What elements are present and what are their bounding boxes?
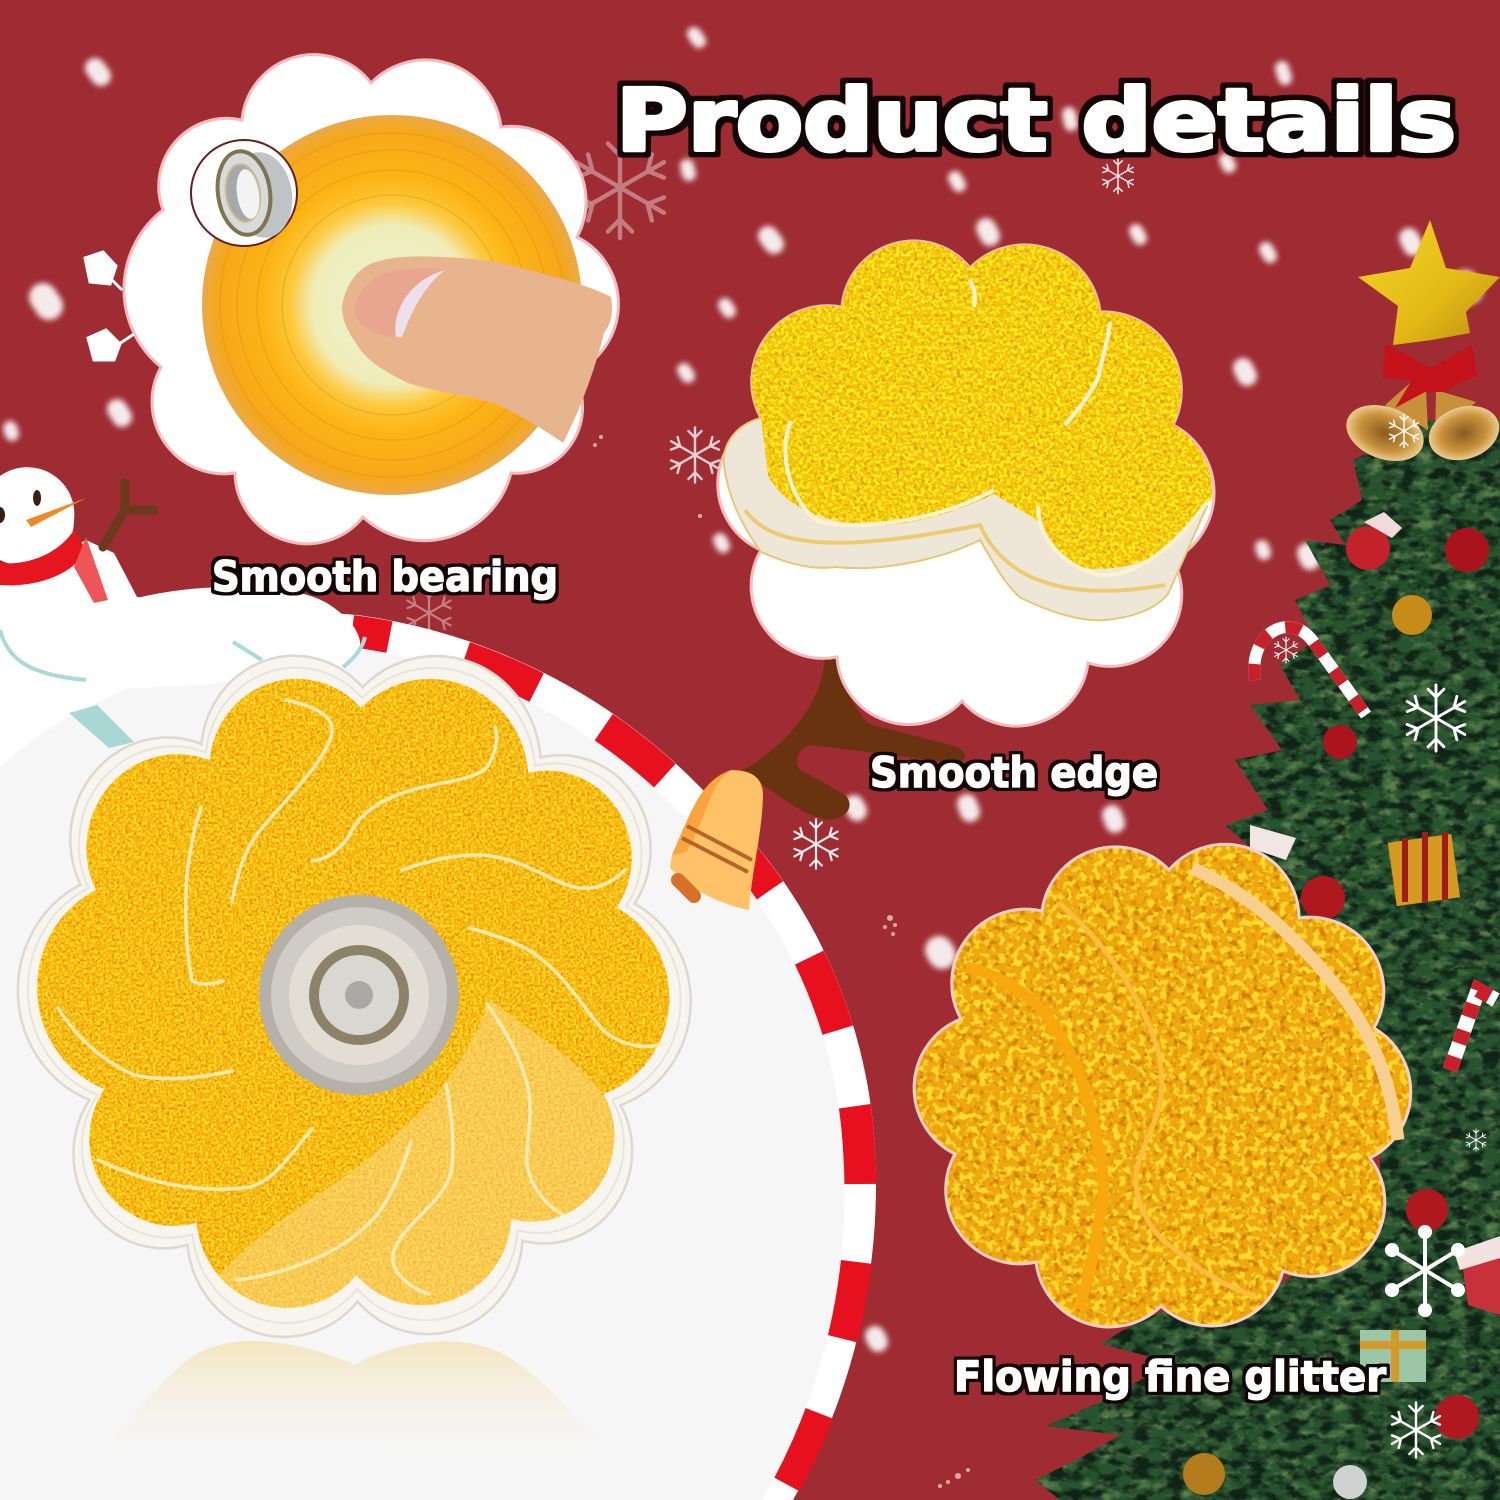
small flake on bell <box>1390 414 1418 448</box>
snowman arm <box>100 587 360 690</box>
snowman head <box>0 467 74 566</box>
clear acrylic outer edge <box>18 656 691 1337</box>
golden bells <box>1339 370 1500 471</box>
label: smooth bearing: Smooth bearing <box>212 552 558 601</box>
panel: smooth edge photo <box>718 241 1214 726</box>
tree ornaments <box>1183 512 1500 1499</box>
gold paw glitter <box>752 241 1212 569</box>
panel: smooth bearing photo <box>85 55 618 544</box>
scarf tail <box>74 537 108 603</box>
white cloud backdrop <box>124 55 618 544</box>
snowman teal shading <box>0 630 365 680</box>
label: smooth edge: Smooth edge <box>870 748 1158 797</box>
red scarf <box>0 530 86 585</box>
inner light disc <box>0 647 845 1500</box>
white circle with candy-cane ring <box>0 540 876 1500</box>
inner clear edge line <box>28 668 681 1323</box>
spinning orange disc <box>202 115 582 495</box>
carrot nose <box>26 498 86 527</box>
antler decoration <box>740 659 965 820</box>
dotted snowflake <box>1385 1225 1465 1317</box>
thumbnail <box>355 268 445 337</box>
thumb <box>342 256 612 443</box>
main gold spinner <box>18 656 691 1337</box>
title: Product details <box>616 71 1456 171</box>
tree snowflakes <box>1275 637 1486 1458</box>
ring red stripes <box>352 631 860 1488</box>
small glitter sprays <box>593 435 970 1488</box>
swirl blade lines <box>58 700 661 1294</box>
snowflakes <box>407 137 1133 869</box>
christmas tree <box>1035 220 1500 1500</box>
glitter flower body <box>914 844 1411 1327</box>
stockings <box>1346 526 1390 570</box>
rim gold band <box>745 510 1165 591</box>
stick arm <box>103 483 154 547</box>
snowman <box>0 467 365 690</box>
motion rings <box>220 133 564 477</box>
white cloud backdrop <box>718 241 1214 726</box>
flower outline <box>914 844 1411 1327</box>
bearing inset icon <box>191 140 298 246</box>
teal strip <box>69 705 134 748</box>
panel: flowing fine glitter photo <box>914 844 1411 1327</box>
star topper <box>1358 220 1500 345</box>
main spinner reflection <box>80 1341 625 1470</box>
center bearing hub <box>259 895 459 1095</box>
clear acrylic rim <box>724 418 1207 620</box>
gold glitter body <box>37 679 669 1308</box>
swirl highlights <box>785 280 1207 575</box>
snowman eyes <box>0 490 41 523</box>
small white hex marks <box>85 252 134 360</box>
clear swirl bands <box>967 868 1398 1309</box>
red bow <box>1383 343 1477 408</box>
pale glitter sheen <box>215 1000 623 1318</box>
tree foliage <box>1035 420 1500 1500</box>
label: flowing fine glitter: Flowing fine glitter <box>954 1352 1386 1401</box>
ring white base <box>0 540 876 1500</box>
orange bell <box>670 770 763 910</box>
